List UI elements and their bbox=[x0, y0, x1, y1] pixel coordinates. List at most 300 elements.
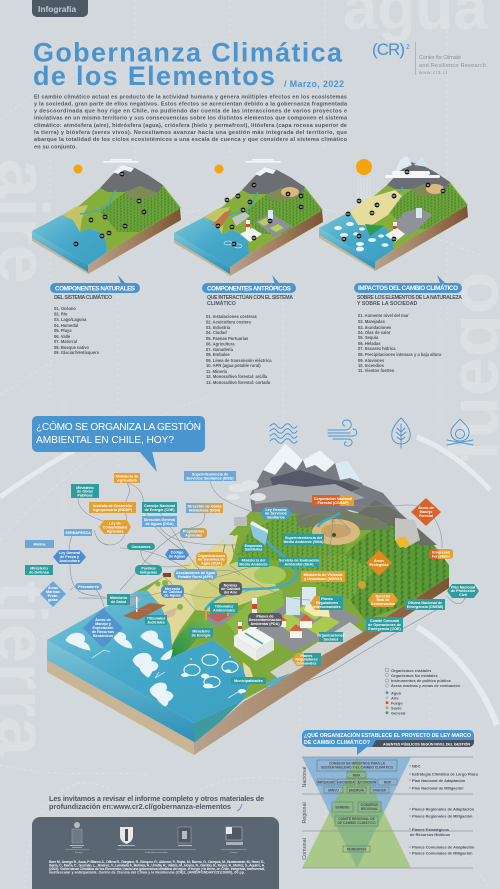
label: CNE: Consejo Nacional bbox=[144, 504, 175, 508]
callout: gestión ambiental bbox=[32, 416, 205, 472]
panel: impactos del cambio climático: IMPACTOS DEL CAMBIO CLIMÁTICO bbox=[358, 283, 458, 292]
label: DOH: Hidráulicas (DOH) bbox=[189, 508, 221, 512]
list: planning instruments: Planes Estratégicos bbox=[412, 827, 449, 832]
panel: impactos del cambio climático: 01. Aumento nivel del mar bbox=[358, 313, 409, 318]
label: Ministerio de Obras Públicas bbox=[71, 484, 99, 498]
label: Ministerio del Medio Ambiente bbox=[238, 557, 269, 567]
panel: componentes naturales: 06. Valle bbox=[54, 334, 71, 339]
label: Áreas Protegidas: Protegidas bbox=[369, 563, 389, 567]
label: SEA bbox=[279, 557, 320, 567]
illustration: block anthropic components: 05 bbox=[217, 224, 220, 228]
label: Ley General de Pesca: de Pesca y bbox=[60, 555, 80, 559]
logo: universidad 2 bbox=[118, 827, 135, 846]
panel: componentes naturales: 02. Río bbox=[54, 312, 68, 316]
panel: componentes antrópicos bbox=[202, 275, 296, 385]
label: Tribunales Judiciales: Judiciales bbox=[147, 620, 165, 624]
logo: ministerio bbox=[226, 827, 243, 845]
label: SISS: Servicios Sanitarios (SISS) bbox=[186, 476, 234, 480]
label: Áreas Marinas Protegidas bbox=[40, 581, 66, 607]
invitation text: Les invitamos a revisar el informe completo y otros materiales de bbox=[49, 794, 264, 803]
illustration: block anthropic components: 08 bbox=[242, 208, 245, 212]
list: planning instruments: Planes Regionales de Adaptación bbox=[412, 806, 475, 812]
list: planning instruments bbox=[409, 764, 479, 856]
label: Áreas Marinas Protegidas: Prote- bbox=[48, 594, 59, 598]
illustration: block natural components: 05 bbox=[101, 234, 104, 238]
illustration: block climate impacts: 09 bbox=[358, 199, 361, 203]
label: Propietarios Agrícolas bbox=[180, 528, 207, 538]
label: Mesas de Calidad de Aguas bbox=[161, 585, 184, 598]
icon: leaf bbox=[392, 418, 410, 448]
intro paragraph: y descoordinada que hoy rige en Chile, no pudiendo dar cuenta de las interacciones de varios proyectos e bbox=[34, 108, 347, 114]
illustration: block climate impacts: 08 bbox=[371, 211, 374, 215]
label: SMA bbox=[283, 534, 324, 545]
logo: CR2: www.cr2.cl bbox=[419, 70, 447, 76]
panel: pyramid header: DE CAMBIO CLIMÁTICO? bbox=[304, 739, 370, 746]
panel: impactos del cambio climático: 02. Marejadas bbox=[358, 319, 386, 324]
label: Consumos: Consumos bbox=[131, 545, 151, 549]
label: Ley de Comunidades Agrícolas bbox=[99, 520, 131, 534]
label: MINVU bbox=[301, 571, 345, 582]
label: Áreas de Manejo: de Recursos bbox=[92, 630, 114, 634]
label: Áreas de Manejo Forestal: Áreas de bbox=[418, 505, 434, 510]
label: Normas de Calidad del Aire: de Calidad bbox=[221, 587, 241, 591]
illustration: block anthropic components: 03 bbox=[231, 225, 234, 229]
panel: componentes naturales: 05. Playa bbox=[54, 328, 72, 333]
label: Comité Comunal de Operaciones bbox=[366, 617, 403, 632]
illustration: block anthropic components: 13 bbox=[300, 205, 303, 209]
label: SERNAPESCA: SERNAPESCA bbox=[65, 531, 91, 535]
panel: componentes antrópicos: 02. Acuicultura costera bbox=[206, 320, 252, 324]
label: Ley General de Servicios Sanitarios: de Servicios bbox=[265, 512, 287, 516]
citation bbox=[49, 860, 265, 874]
label: Áreas de Manejo: Áreas de bbox=[95, 617, 111, 622]
panel: componentes antrópicos: 01. Instalaciones costeras bbox=[206, 314, 257, 319]
list: planning instruments: de Recursos Hídricos bbox=[410, 832, 450, 837]
citation: Boer M., Arango R., Azua, P. Blanco A., Olfiera R., Gargano, R., Bórquez, R., Aldunce, P., Rojas, M., Bueno, G., Campos, M., Bustamante, M., Harel, D., bbox=[49, 860, 265, 864]
list: planning instruments: Plan Nacional de Mitigación bbox=[412, 786, 464, 790]
label: INDAP: Agropecuario (INDAP) bbox=[93, 508, 133, 512]
label: SMA: Medio Ambiente (SMA) bbox=[283, 540, 324, 544]
legend: Organismos estatales bbox=[391, 668, 431, 673]
label: MINVU: y Urbanismo (MINVU) bbox=[304, 577, 343, 581]
label: Ministerio de Salud: Ministerio bbox=[110, 596, 128, 600]
chart: governance pyramid: MINVU bbox=[328, 788, 339, 792]
label: Planes Reguladores Intercomunales: Reguladores bbox=[316, 601, 338, 605]
label: Ministerio del Medio Ambiente: Medio Ambiente bbox=[239, 562, 268, 566]
label: CNE: de Energía (CNE) bbox=[144, 508, 175, 512]
label: Plan Nacional de Protección Civil: Plan Nacional bbox=[451, 586, 475, 590]
label: Ley General de Servicios Sanitarios: Sanitarios bbox=[267, 516, 285, 520]
label: Organizaciones de Usuarios de Agua: Agua (OUA) bbox=[201, 562, 223, 566]
label: Ministerio de Defensa bbox=[25, 565, 53, 575]
panel: componentes antrópicos: 06. Agricultura bbox=[206, 342, 235, 346]
label: Asociaciones de Agua Potable Rural: Potable Rural (APR) bbox=[178, 575, 214, 579]
panel: pyramid header bbox=[302, 730, 474, 755]
clouds bbox=[226, 480, 266, 501]
panel: impactos del cambio climático: 03. Inundaciones bbox=[358, 325, 392, 330]
city block bbox=[250, 587, 363, 680]
label: Ley General de Servicios Sanitarios bbox=[260, 507, 292, 520]
chart: governance pyramid: COMITÉ REGIONAL DE bbox=[338, 816, 376, 821]
list: planning instruments: Planes Comunales de Adaptación bbox=[412, 844, 475, 850]
label: DOH bbox=[186, 503, 223, 513]
port bbox=[203, 606, 235, 628]
citation: multiescalar y anticipatoria. Centro de Ciencia del Clima y la Resiliencia (CR)2, (ANID/FONDAP/15110009), 60 pp. bbox=[49, 870, 245, 874]
waves bbox=[66, 631, 173, 706]
chart: governance pyramid: DE CAMBIO CLIMÁTICO bbox=[337, 820, 376, 825]
intro paragraph: climático: atmósfera (aire), hidrósfera (agua), criósfera (hielo y permafrost), litósfera (capa rocosa superior de bbox=[34, 123, 347, 129]
label: Propietarios Agrícolas: Propietarios bbox=[183, 530, 204, 534]
illustration: block natural components: 04 bbox=[108, 231, 111, 235]
illustration: block climate impacts: 06 bbox=[406, 170, 409, 174]
illustration: block natural components: 02 bbox=[90, 218, 93, 222]
river bbox=[205, 513, 340, 610]
label: MINVU: Ministerio de Vivienda bbox=[304, 573, 343, 577]
list: planning instruments: Plan Nacional de Adaptación bbox=[412, 778, 466, 783]
illustration: block climate impacts bbox=[319, 156, 468, 271]
tab: Infografía: Infografía bbox=[38, 4, 76, 14]
label: Plan Nacional de Protección Civil: Civil bbox=[459, 593, 467, 597]
label: Organizaciones Sociales bbox=[317, 632, 345, 642]
label: Derecho Real de Conservación: Real de bbox=[376, 598, 390, 602]
label: Planes Reguladores Intercomunales: Planes bbox=[321, 597, 333, 601]
legend: General bbox=[391, 710, 406, 716]
panel: componentes antrópicos: COMPONENTES ANTRÓPICOS bbox=[207, 284, 291, 292]
panel: componentes antrópicos: 03. Industria bbox=[206, 325, 231, 330]
illustration: block climate impacts: 11 bbox=[427, 183, 430, 187]
label: Ley General de Pesca bbox=[53, 550, 86, 564]
label: Municipalidades: Municipalidades bbox=[234, 679, 263, 683]
panel: componentes antrópicos: 12. Monocultivo forestal: arcilla bbox=[206, 374, 268, 379]
label: Organizaciones Sociales: Organizaciones bbox=[317, 634, 345, 638]
label: Marina bbox=[25, 540, 54, 548]
label: Empresas Forestales bbox=[429, 549, 453, 559]
list: planning instruments: Estrategia Climática de Largo Plazo bbox=[412, 772, 479, 776]
panel: componentes naturales: 01. Océano bbox=[54, 306, 76, 311]
label: Derecho Real de Conservación: Derecho bbox=[376, 594, 391, 598]
illustration: block natural components: 01 bbox=[75, 242, 78, 246]
legend: Suelo bbox=[391, 706, 402, 710]
label: SISS bbox=[184, 471, 236, 481]
connectors bbox=[70, 481, 465, 688]
label: Ministerio del Medio Ambiente: Ministerio del bbox=[242, 558, 265, 562]
label: Áreas Protegidas: Áreas bbox=[374, 558, 384, 563]
label: SISS: Superintendencia de bbox=[192, 472, 228, 476]
label: INDAP bbox=[89, 502, 136, 513]
label: Empresas Sanitarias: Sanitarias bbox=[245, 548, 262, 552]
panel: footer: Fondap bbox=[230, 852, 238, 854]
panel: componentes antrópicos: 13. Monocultivo forestal: cortado bbox=[206, 380, 271, 385]
label: DGA: Dirección General bbox=[144, 518, 175, 522]
label: Código de Aguas bbox=[165, 549, 189, 560]
logo: CR2: (CR) bbox=[372, 40, 405, 59]
label: Pescadores: Pescadores bbox=[78, 585, 99, 589]
panel: componentes naturales: 08. Bosque nativo bbox=[54, 345, 90, 350]
illustration: block natural components: 09 bbox=[121, 172, 124, 176]
illustration: block climate impacts: 10 bbox=[376, 203, 379, 207]
panel: componentes naturales: 03. Lago/Laguna bbox=[54, 317, 87, 322]
label: ONEMI: Oficina Nacional de bbox=[408, 601, 442, 605]
label: Ministerio de Obras Públicas: Públicas bbox=[77, 494, 93, 498]
logo: universidad 3 bbox=[178, 827, 192, 846]
label: Ministerio de Agricultura bbox=[114, 473, 140, 483]
label: Ministerio de Obras Públicas: Ministerio bbox=[76, 486, 94, 490]
panel: componentes antrópicos: 09. Línea de transmisión eléctrica bbox=[206, 358, 272, 363]
label: Áreas de Manejo bbox=[83, 608, 123, 648]
label: Tribunales Judiciales: Tribunales bbox=[147, 616, 165, 620]
panel: impactos del cambio climático: 11. Vientos fuertes bbox=[358, 368, 395, 373]
label: Empresas Forestales: Empresas bbox=[432, 550, 450, 554]
intro paragraph: la tierra) y biósfera (seres vivos). Necesitamos avanzar hacia una gestión más integrada del territorio, que bbox=[34, 130, 347, 136]
label: Asociaciones de Agua Potable Rural bbox=[174, 569, 217, 580]
label: Pueblos Indígenas: Indígenas bbox=[140, 570, 157, 574]
label: CNE bbox=[142, 502, 177, 513]
label: CONAF: Corporación Nacional bbox=[314, 497, 352, 501]
label: SEA: Servicio de Evaluación bbox=[279, 558, 320, 562]
label: Comité Comunal de Operaciones: de Operaciones de bbox=[368, 623, 401, 627]
callout: gestión ambiental: AMBIENTAL EN CHILE, HOY? bbox=[36, 435, 174, 446]
label: Comité Comunal de Operaciones: Comité Comunal bbox=[370, 619, 399, 623]
legend: Instrumentos de política pública bbox=[391, 678, 452, 683]
power plant bbox=[233, 598, 275, 661]
label: Planes Reguladores Comunales: Planes bbox=[301, 654, 312, 658]
illustration: block climate impacts: 07 bbox=[393, 194, 396, 198]
aquaculture rings bbox=[184, 654, 238, 688]
label: Áreas Marinas Protegidas: Marinas bbox=[46, 590, 60, 594]
label: Áreas Marinas Protegidas: gidas bbox=[48, 598, 58, 602]
panel: footer bbox=[32, 817, 279, 889]
label: Empresas Sanitarias bbox=[243, 543, 264, 552]
label: Tribunales Ambientales: Tribunales bbox=[215, 604, 233, 608]
intro paragraph: abarque la totalidad de los ciclos ecosistémicos a una escala de cuenca y que considere al sistema climático bbox=[34, 137, 348, 143]
label: Tribunales Judiciales bbox=[145, 615, 167, 625]
machinery bbox=[358, 581, 366, 589]
invitation text bbox=[49, 794, 264, 811]
label: Áreas de Manejo: Manejo y bbox=[95, 622, 112, 626]
label: Planes de Descontaminación: Ambiental (PDA) bbox=[250, 622, 280, 626]
label: Áreas de Manejo Forestal: Forestal bbox=[419, 514, 433, 518]
label: SERNAPESCA bbox=[64, 529, 92, 536]
label: Ley General de Servicios Sanitarios: Ley General bbox=[265, 508, 287, 512]
label: Planes Reguladores Comunales: Comunales bbox=[297, 662, 316, 666]
illustration: block anthropic components: 02 bbox=[253, 236, 256, 240]
chart: governance pyramid: MINSAGRI bbox=[318, 780, 334, 784]
label: Propietarios Agrícolas: Agrícolas bbox=[185, 534, 202, 538]
illustration: block climate impacts: 02 bbox=[358, 234, 361, 238]
label: Ley de Comunidades Agrícolas: Ley de bbox=[109, 522, 121, 526]
illustration: block anthropic components: 09 bbox=[237, 194, 240, 198]
list: planning instruments: Planes Regionales de Mitigación bbox=[412, 814, 473, 818]
label: Marina: Marina bbox=[34, 542, 46, 546]
level: Nacional: Nacional bbox=[302, 767, 308, 787]
label: Áreas de Manejo: Explotación bbox=[93, 626, 114, 630]
label: Pueblos Indígenas bbox=[135, 565, 162, 575]
label: Organizaciones Sociales: Sociales bbox=[324, 638, 338, 642]
label: Asociaciones de Agua Potable Rural: Asociaciones de Agua bbox=[176, 571, 216, 575]
mountains bbox=[250, 443, 437, 548]
chart: governance pyramid: SEREMIs bbox=[335, 806, 350, 810]
citation: Ibarra, C., Ibarra, C., Guzmán, L., Jiménez, V., Landaeta F., Barraza, R., Urrutia, R., Valdés, M., Hoyos, N., Garrido, R., Reyes, R., Muñoz, S., Aguirre, A. bbox=[49, 864, 265, 868]
label: Ministerio de Energía bbox=[189, 628, 213, 638]
panel: componentes naturales: 04. Humedal bbox=[54, 323, 78, 328]
panel: componentes naturales: 09. Glaciar/Ventisquero bbox=[54, 350, 100, 355]
illustration: block natural components: 06 bbox=[124, 224, 127, 228]
label: Normas de Calidad del Aire: Normas bbox=[224, 584, 237, 588]
panel: impactos del cambio climático: 10. Incendios bbox=[358, 363, 385, 368]
panel: impactos del cambio climático: Y SOBRE LA SOCIEDAD bbox=[357, 301, 417, 307]
illustration: block natural components: 07 bbox=[143, 210, 146, 214]
list: planning instruments: Planes Comunales de Mitigación bbox=[412, 850, 473, 856]
panel: impactos del cambio climático: SOBRE LOS ELEMENTOS DE LA NATURALEZA bbox=[357, 295, 462, 301]
title bbox=[33, 38, 343, 91]
logo: CR2 bbox=[372, 40, 486, 76]
panel: componentes naturales: 07. Matorral bbox=[54, 339, 77, 344]
water tower bbox=[223, 535, 234, 553]
label: Áreas de Manejo Forestal bbox=[411, 498, 441, 526]
logo: CR2: 2 bbox=[406, 44, 410, 51]
citation: (2022). Gobernanza Climática de los Elementos: hacia una gobernanza climática del agua, el fuego y la tierra, en Chile, integrada, transversal, bbox=[49, 867, 265, 871]
panel: impactos del cambio climático: 08. Precipitaciones intensas y a baja altura bbox=[358, 352, 442, 357]
illustration: block anthropic components: 04 bbox=[269, 219, 272, 223]
label: ONEMI: Emergencia (ONEMI) bbox=[407, 605, 444, 609]
panel: componentes antrópicos: CLIMÁTICO bbox=[207, 300, 236, 307]
label: Áreas de Manejo Forestal: Manejo bbox=[420, 510, 433, 514]
label: Planes de Descontaminación: Descontaminación bbox=[249, 618, 282, 622]
label: Código de Aguas: de Aguas bbox=[169, 554, 185, 558]
illustration: block anthropic components: 10 bbox=[253, 183, 256, 187]
legend bbox=[385, 668, 461, 716]
chart: governance pyramid: GOBIERNO bbox=[361, 803, 379, 807]
illustration: block natural components bbox=[32, 159, 181, 274]
legend: Aire bbox=[391, 696, 399, 700]
panel: componentes naturales bbox=[50, 275, 140, 355]
illustration: block natural components: 03 bbox=[104, 215, 107, 219]
chart: governance pyramid: CONSEJO DE MINISTROS PARA LA bbox=[329, 762, 386, 766]
intro paragraph: en su conjunto. bbox=[34, 144, 77, 150]
panel: componentes naturales: COMPONENTES NATURALES bbox=[55, 286, 135, 292]
intro paragraph: iniciativas en un mismo territorio y sus consecuencias sobre los distintos elementos que componen el sistema bbox=[34, 116, 348, 122]
intro paragraph: y la sociedad, gran parte de ellos negativos. Estos efectos se acrecientan debido a la gobernanza fragmentada bbox=[34, 102, 348, 108]
icon: fire bbox=[447, 419, 473, 445]
illustration: block climate impacts: 05 bbox=[442, 189, 445, 193]
logo: universidad 1 bbox=[70, 822, 84, 848]
panel: componentes antrópicos: 11. Minería bbox=[206, 369, 228, 374]
label: SMA: Superintendencia del bbox=[285, 536, 322, 540]
label: Ministerio de Defensa: Ministerio bbox=[30, 566, 48, 570]
level: Regional: Regional bbox=[302, 802, 308, 824]
legend: Áreas marinas y zonas de evaluación bbox=[391, 683, 461, 688]
icon: water bbox=[270, 424, 297, 443]
panel: componentes antrópicos: 04. Ciudad bbox=[206, 330, 227, 335]
illustration: block anthropic components: 12 bbox=[300, 194, 303, 198]
label: Planes Reguladores Intercomunales: Intercomunales bbox=[313, 605, 341, 609]
open pit mine bbox=[312, 519, 360, 545]
panel: componentes antrópicos: 08. Embalse bbox=[206, 352, 230, 357]
intro paragraph bbox=[34, 94, 348, 150]
label: Municipalidades bbox=[231, 677, 266, 684]
panel: impactos del cambio climático: 04. Olas de calor bbox=[358, 330, 391, 335]
panel: impactos del cambio climático: 05. Sequía bbox=[358, 335, 379, 340]
legend: Organismos No estatales bbox=[391, 673, 438, 678]
chart: governance pyramid: ENERGÍA bbox=[349, 788, 365, 792]
label: CONAF bbox=[312, 495, 354, 506]
panel: componentes naturales: DEL SISTEMA CLIMÁTICO bbox=[54, 294, 112, 301]
title: de los Elementos bbox=[33, 61, 275, 91]
chart: governance pyramid: HACIENDA bbox=[337, 780, 355, 784]
logo: CR2: and Resilience Research bbox=[419, 63, 486, 69]
label: Ley General de Pesca: Ley General bbox=[59, 551, 80, 555]
illustration: block anthropic components: 01 bbox=[233, 242, 236, 246]
label: Pueblos Indígenas: Pueblos bbox=[141, 566, 156, 570]
label: Plan Nacional de Protección Civil bbox=[447, 584, 479, 598]
label: Ministerio de Energía: Ministerio bbox=[192, 630, 210, 634]
callout: gestión ambiental: ¿CÓMO SE ORGANIZA LA GESTIÓN bbox=[36, 420, 201, 433]
label: Organizaciones de Usuarios de Agua bbox=[196, 552, 227, 566]
legend: Fuego bbox=[391, 700, 403, 706]
piers bbox=[120, 573, 183, 620]
panel: componentes antrópicos: 05. Faenas Portuarias bbox=[206, 336, 249, 341]
dam bbox=[250, 524, 268, 545]
label: Planes Reguladores Comunales bbox=[292, 653, 321, 666]
label: Organizaciones de Usuarios de Agua: Organizaciones bbox=[198, 554, 225, 558]
panel: footer: Fondap bbox=[75, 852, 83, 854]
list: planning instruments: NDC bbox=[412, 764, 421, 768]
label: Planes de Descontaminación bbox=[248, 613, 282, 627]
label: Ley de Comunidades Agrícolas: Comunidades bbox=[103, 526, 127, 530]
label: DGA bbox=[142, 516, 177, 527]
label: Normas de Calidad del Aire bbox=[219, 582, 242, 595]
label: Pescadores bbox=[75, 583, 102, 590]
illustration: block anthropic components: 11 bbox=[287, 192, 290, 196]
label: Plan Nacional de Protección Civil: de Protección bbox=[451, 589, 476, 593]
label: Áreas de Manejo: Bentónicos bbox=[93, 634, 113, 638]
panel: impactos del cambio climático: 09. Aluviones bbox=[358, 358, 385, 363]
label: INDAP: Instituto de Desarrollo bbox=[93, 504, 133, 508]
panel: pyramid header: ¿QUÉ ORGANIZACIÓN ESTABLECE EL PROYECTO DE LEY MARCO bbox=[304, 731, 471, 739]
illustration: block natural components: 08 bbox=[138, 199, 141, 203]
panel: footer: Instituciones asociadas bbox=[145, 851, 169, 854]
label: Tribunales Ambientales: Ambientales bbox=[213, 608, 235, 612]
label: SEA: Ambiental (SEA) bbox=[285, 562, 314, 566]
label: Empresas Sanitarias: Empresas bbox=[245, 544, 262, 548]
legend: Agua bbox=[391, 690, 402, 696]
chart: governance pyramid: ECONOMÍA bbox=[358, 780, 377, 784]
label: Planes Reguladores Comunales: Reguladores bbox=[295, 658, 318, 662]
intro paragraph: El cambio climático actual es producto de la actividad humana y genera múltiples efectos en los ecosistemas bbox=[34, 94, 347, 100]
label: Ministerio de Defensa: de Defensa bbox=[29, 570, 50, 574]
chart: governance pyramid: MUNICIPIOS bbox=[347, 848, 367, 852]
panel: componentes antrópicos: 07. Ganadería bbox=[206, 347, 234, 352]
label: Normas de Calidad del Aire: del Aire bbox=[224, 590, 237, 594]
label: Ministerio de Energía: de Energía bbox=[192, 634, 211, 638]
label: Derecho Real de Conservación bbox=[368, 593, 398, 607]
label: Comité Comunal de Operaciones: Emergencia (COE) bbox=[368, 627, 401, 631]
logo: CR2: Center for Climate bbox=[419, 55, 461, 61]
chart: governance pyramid: SUSTENTABILIDAD Y EL CAMBIO CLIMÁTICO bbox=[321, 764, 394, 770]
label: Código de Aguas: Código bbox=[171, 550, 184, 554]
level: Comunal: Comunal bbox=[302, 838, 308, 860]
panel: pyramid header: AGENTES PÚBLICOS SEGÚN NIVEL DEL GESTIÓN bbox=[383, 742, 470, 746]
illustration: block anthropic components: 06 bbox=[226, 198, 229, 202]
label: Ministerio de Obras Públicas: de Obras bbox=[77, 490, 93, 494]
illustration: block climate impacts: 01 bbox=[343, 237, 346, 241]
label: ONEMI bbox=[405, 599, 445, 610]
illustration: block climate impacts: 03 bbox=[347, 212, 350, 216]
invitation text: profundización en:www.cr2.cl/gobernanza-elementos bbox=[49, 802, 231, 811]
label: Ministerio de Agricultura: Ministerio de bbox=[116, 474, 138, 478]
label: Tribunales Ambientales bbox=[210, 603, 238, 613]
label: Ministerio de Agricultura: Agricultura bbox=[117, 478, 138, 482]
